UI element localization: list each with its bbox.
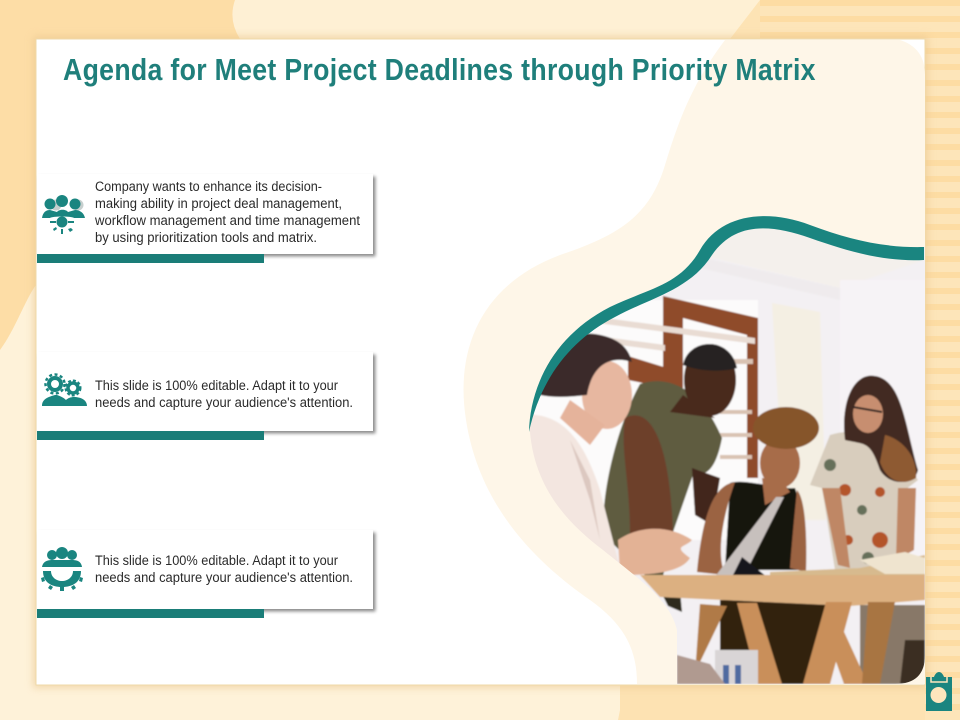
text: item 2: This slide is 100% editable. Adapt it to your bbox=[95, 378, 338, 393]
text: item 1 bbox=[94, 179, 360, 245]
curtain bbox=[772, 303, 826, 520]
text: item 1: Company wants to enhance its decision- bbox=[95, 179, 322, 194]
panel: item 2 bbox=[37, 352, 373, 440]
tablet bbox=[714, 497, 784, 580]
table and books bbox=[770, 555, 925, 578]
text: item 3 bbox=[95, 553, 353, 585]
panel: item 3 bbox=[37, 530, 373, 618]
photo: team around a table bbox=[530, 228, 925, 684]
window frame bbox=[663, 296, 758, 478]
text: item 1: workflow management and time management bbox=[94, 213, 360, 228]
title: Agenda for Meet Project Deadlines through Priority Matrix bbox=[63, 53, 816, 88]
text: item 3: This slide is 100% editable. Adapt it to your bbox=[95, 553, 338, 568]
table pants bbox=[720, 600, 830, 684]
text: item 2 bbox=[95, 378, 353, 410]
icon: people with gears bbox=[42, 374, 87, 406]
icon: bag page marker bbox=[926, 672, 952, 711]
woman 2 bbox=[603, 381, 722, 590]
woman 3 bbox=[725, 482, 806, 570]
text: item 2: needs and capture your audience's attention. bbox=[95, 395, 353, 410]
text: item 1: making ability in project deal management, bbox=[95, 196, 342, 211]
woman 1 bbox=[530, 414, 618, 562]
text: item 3: needs and capture your audience's attention. bbox=[95, 570, 353, 585]
woman 4 bbox=[810, 432, 918, 570]
icon: team with check gear bbox=[42, 195, 85, 234]
teal wave band bbox=[529, 216, 924, 432]
text: item 1: by using prioritization tools and matrix. bbox=[95, 230, 317, 245]
panel: item 1 bbox=[37, 174, 373, 263]
icon: team over gear bbox=[41, 547, 83, 591]
